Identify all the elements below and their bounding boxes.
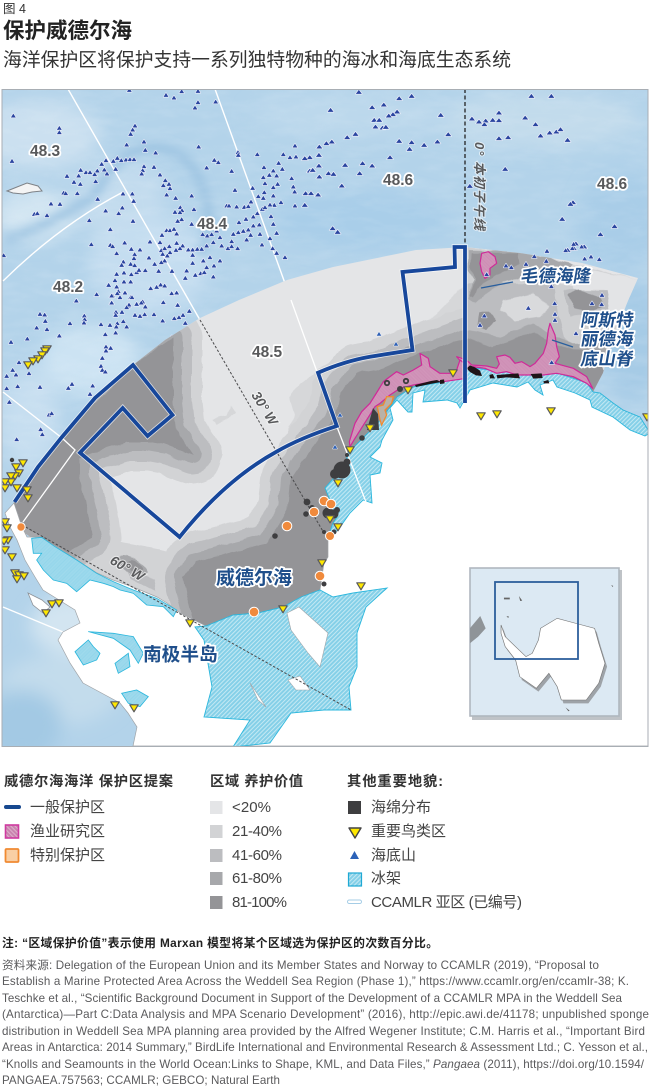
legend item: 41-60 percent: 41-60% — [232, 847, 282, 864]
subarea labels: 48.4 — [197, 216, 228, 233]
sources: “Knolls and Seamounts in the World Ocean:Links to Shape, KML, and Data Files,” Pangaea (2011), https://doi.org/10.1594/ — [2, 1058, 645, 1071]
ice shelf: Filchner-Ronne — [195, 588, 387, 747]
meridian: prime meridian — [464, 89, 466, 247]
islands in ice shelf — [250, 607, 328, 707]
legend item: 61-80 percent: 61-80% — [232, 870, 282, 887]
sources: Areas in Antarctica: 2014 Summary,” BirdLife International and Environmental Research & Assessment Ltd.; C. Yesson et al., — [2, 1041, 648, 1054]
place labels: 毛德海隆 — [519, 266, 593, 286]
special protection zone markers — [17, 496, 336, 617]
legend item: seamounts — [350, 847, 416, 864]
special protection zone — [377, 397, 393, 425]
sources — [2, 958, 649, 1087]
meridian labels: 60° W — [108, 553, 148, 585]
subarea labels: 48.6 — [597, 176, 628, 193]
title: 保护威德尔海 — [3, 19, 132, 43]
Antarctic land — [5, 368, 650, 746]
subarea labels: 48.6 — [383, 172, 414, 189]
ice shelves — [32, 368, 650, 747]
South Shetland islands — [28, 593, 50, 613]
subtitle: 海洋保护区将保护支持一系列独特物种的海冰和海底生态系统 — [3, 49, 511, 70]
ice shelf: Dronning Maud coast — [325, 368, 650, 537]
legend item: important bird areas: 重要鸟类区 — [371, 823, 446, 840]
island: South Georgia — [7, 183, 42, 194]
place labels: 丽德海 — [579, 329, 636, 349]
legend item: seamounts: 海底山 — [371, 847, 416, 864]
figure number: 图 4 — [3, 2, 26, 16]
sources: PANGAEA.757563; CCAMLR; GEBCO; Natural Earth — [2, 1074, 280, 1087]
sources: 资料来源: Delegation of the European Union and its Member States and Norway to CCAMLR (2019), “Proposal to — [2, 958, 599, 972]
sources: (Antarctica)—Part C:Data Analysis and MPA Scenario Development” (2016), http://epic.awi.de/41178; unpublished sponge — [2, 1008, 649, 1021]
legend item: 81-100 percent: 81-100% — [232, 894, 287, 911]
subarea labels: 48.3 — [30, 143, 61, 160]
subarea labels: 48.5 — [252, 344, 283, 361]
legend item: CCAMLR subareas: CCAMLR 亚区 (已编号) — [371, 894, 522, 911]
place labels: 南极半岛 — [143, 644, 218, 665]
legend: regional conservation value: 区域 养护价值 — [210, 772, 303, 790]
legend: proposed MPA zones — [4, 772, 174, 864]
ocean bathymetry background — [0, 89, 650, 760]
sources: Establish a Marine Protected Area Across the Weddell Sea Region (Phase 1),” https://www.ccamlr.org/en/ccamlr-38; K. — [2, 975, 629, 988]
legend: regional conservation value — [210, 772, 303, 911]
legend item: 21-40 percent: 21-40% — [232, 823, 282, 840]
ice shelf: Wilkins and George VI — [75, 632, 148, 707]
legend item: ice shelf — [348, 870, 401, 887]
meridian labels — [108, 142, 487, 585]
place labels — [143, 266, 636, 665]
place labels: 底山脊 — [579, 348, 636, 369]
legend: proposed MPA zones: 威德尔海海洋 保护区提案 — [4, 772, 174, 790]
proposed MPA general protection zone boundary — [14, 247, 465, 537]
subarea labels — [30, 143, 628, 361]
seamounts — [4, 90, 615, 439]
subarea lines over ocean — [3, 89, 291, 632]
callout lines — [481, 282, 573, 347]
meridian labels: 0° 本初子午线 — [472, 142, 487, 232]
note: 注: “区域保护价值”表示使用 Marxan 模型将某个区域选为保护区的次数百分比。 — [2, 936, 438, 950]
important bird areas — [4, 349, 647, 708]
sources: Teschke et al., “Scientific Background Document in Support of the Development of a CCAMLR MPA in the Weddell Sea — [2, 992, 623, 1005]
legend: other features — [347, 772, 522, 911]
meridian labels: 30° W — [248, 389, 281, 429]
white subarea lines over zones — [23, 300, 366, 522]
sponge distribution — [10, 365, 549, 586]
south-west shaded band — [94, 542, 166, 596]
place labels: 威德尔海 — [216, 566, 292, 589]
inset locator map — [470, 568, 622, 720]
fisheries research zones — [349, 252, 593, 447]
map frame — [2, 90, 648, 746]
legend item: general protection zone: 一般保护区 — [30, 799, 105, 816]
seamounts on shelf — [332, 241, 605, 450]
place labels: 阿斯特 — [579, 309, 636, 330]
meridian: 60 W — [22, 525, 351, 710]
panel: Weddell Sea map — [0, 89, 650, 760]
legend: other features: 其他重要地貌: — [347, 772, 443, 790]
legend item: special protection zone: 特别保护区 — [30, 847, 105, 864]
meridian: 30 W — [200, 320, 328, 540]
sources: distribution in Weddell Sea MPA planning area provided by the Alfred Wegener Institute; C.M. Harris et al., “Important Bird — [2, 1025, 645, 1038]
legend item: fisheries research zone: 渔业研究区 — [30, 823, 105, 840]
east sector zones — [465, 247, 638, 393]
ice shelf: Larsen — [32, 537, 177, 617]
subarea labels: 48.2 — [53, 279, 83, 296]
legend item: under 20 percent: <20% — [232, 799, 271, 816]
legend item: ice shelf: 冰架 — [371, 870, 401, 887]
Marxan conservation value grey zones — [14, 247, 638, 626]
legend item: sponges: 海绵分布 — [371, 799, 431, 816]
